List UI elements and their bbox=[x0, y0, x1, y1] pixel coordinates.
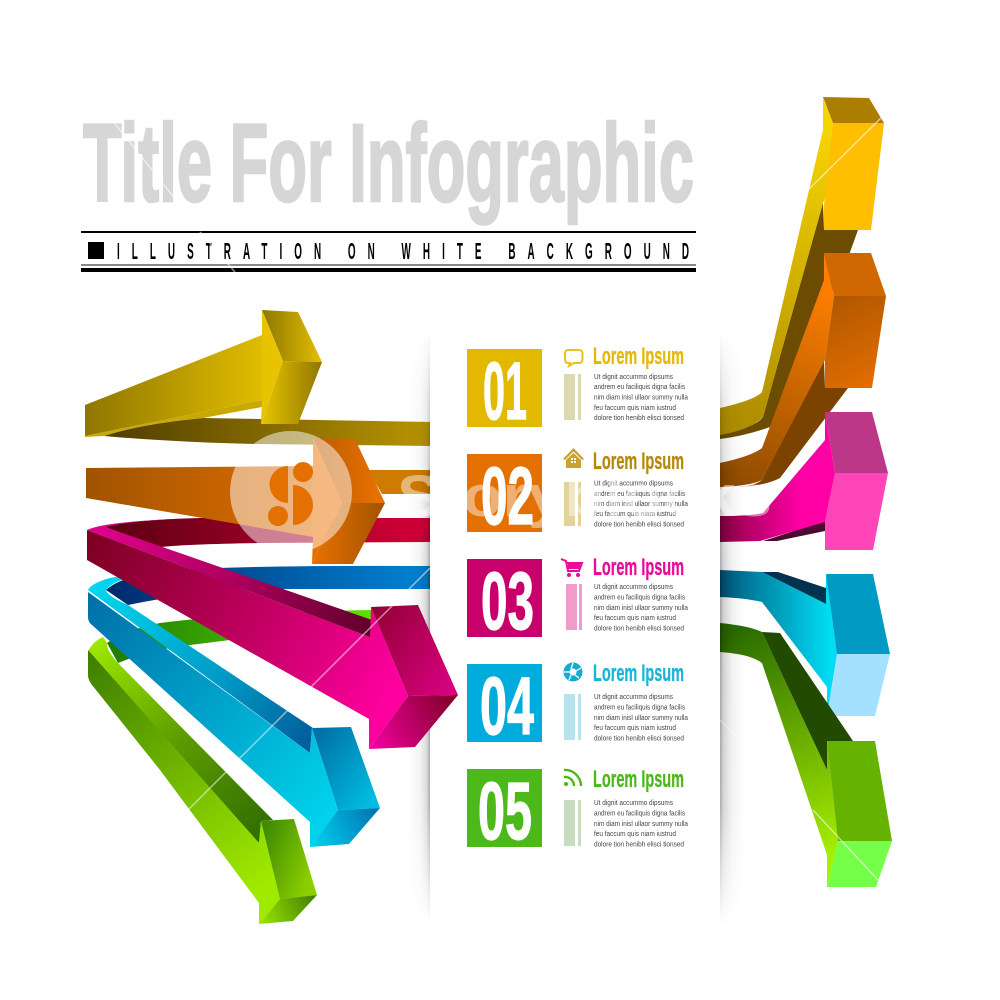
number tile 03 bbox=[467, 556, 542, 647]
text block 3: andrem eu faciliquis digna facilis bbox=[594, 594, 685, 602]
text block 4: Ut dignit accummo dipsums bbox=[594, 694, 673, 701]
progress bar 4 bbox=[564, 694, 581, 740]
right arrow: yellow bbox=[720, 97, 884, 439]
text block 5: Ut dignit accummo dipsums bbox=[594, 800, 673, 807]
number tile 04 bbox=[467, 661, 542, 752]
icon: speech bubble bbox=[565, 350, 582, 366]
text block 3: Ut dignit accummo dipsums bbox=[594, 584, 673, 591]
left ribbons behind the panel bbox=[88, 418, 432, 663]
text block 5: andrem eu faciliquis digna facilis bbox=[594, 810, 685, 818]
number tile 05 bbox=[467, 766, 542, 857]
text block 2: feu faccum quis niam iustrud bbox=[594, 511, 676, 518]
right arrow: orange bbox=[720, 253, 886, 487]
progress bar 3 bbox=[566, 584, 582, 630]
text block 4 bbox=[593, 660, 688, 742]
watermark bbox=[112, 115, 884, 880]
subtitle bar: ILLUSTRATION ON WHITE BACKGROUND bbox=[117, 238, 689, 264]
icon: shopping cart bbox=[561, 559, 582, 577]
text block 1 bbox=[593, 343, 688, 422]
number tile 04: 04 bbox=[480, 661, 534, 752]
progress bar 5 bbox=[564, 800, 581, 846]
text block 3: nim diam inisl ullaor summy nulla bbox=[594, 605, 688, 612]
number tile 03: 03 bbox=[481, 556, 534, 647]
text block 1: Ut dignit accummo dipsums bbox=[594, 374, 673, 381]
text block 4: dolore tion henibh elisci tionsed bbox=[594, 736, 684, 742]
text block 5: nim diam inisl ullaor summy nulla bbox=[594, 821, 688, 828]
text block 1: andrem eu faciliquis digna facilis bbox=[594, 384, 685, 391]
number tile 02 bbox=[467, 451, 542, 542]
text block 2 bbox=[593, 448, 688, 528]
text block 1: nim diam inisl ullaor summy nulla bbox=[594, 394, 688, 402]
text block 1: dolore tion henibh elisci tionsed bbox=[594, 415, 684, 422]
text block 3 bbox=[593, 554, 688, 632]
watermark: Storyblocks bbox=[397, 464, 772, 529]
left arrow: green bbox=[88, 637, 317, 924]
text block 3: Lorem Ipsum bbox=[593, 554, 684, 581]
text block 3: dolore tion henibh elisci tionsed bbox=[594, 626, 684, 632]
text block 2: Ut dignit accummo dipsums bbox=[594, 480, 673, 488]
icon: rss bbox=[564, 770, 581, 786]
text block 2: Lorem Ipsum bbox=[593, 448, 684, 475]
text block 2: nim diam inisl ullaor summy nulla bbox=[594, 501, 688, 508]
number tile 01 bbox=[467, 346, 542, 437]
right arrow: magenta bbox=[720, 412, 888, 550]
text block 5: dolore tion henibh elisci tionsed bbox=[594, 842, 684, 848]
white centre panel bbox=[430, 335, 720, 925]
text block 1: feu faccum quis niam iustrud bbox=[594, 405, 676, 412]
text block 1: Lorem Ipsum bbox=[593, 343, 684, 370]
left arrow: magenta bbox=[87, 518, 458, 749]
icon: house bbox=[563, 448, 584, 468]
number tile 02: 02 bbox=[481, 451, 534, 542]
left arrow: blue bbox=[88, 578, 380, 847]
right arrow: blue bbox=[720, 570, 890, 716]
text block 4: nim diam inisl ullaor summy nulla bbox=[594, 715, 688, 722]
text block 5 bbox=[593, 766, 688, 848]
text block 5: feu faccum quis niam iustrud bbox=[594, 831, 676, 838]
text block 4: feu faccum quis niam iustrud bbox=[594, 725, 676, 732]
text block 3: feu faccum quis niam iustrud bbox=[594, 615, 676, 622]
number tile 05: 05 bbox=[478, 766, 532, 857]
left arrow: yellow bbox=[85, 310, 322, 437]
progress bar 1 bbox=[564, 374, 581, 420]
progress bar 2 bbox=[564, 482, 581, 526]
number tile 01: 01 bbox=[483, 346, 527, 437]
text block 4: andrem eu faciliquis digna facilis bbox=[594, 704, 685, 712]
left arrow: orange bbox=[86, 438, 385, 564]
text block 2: dolore tion henibh elisci tionsed bbox=[594, 522, 684, 528]
text block 5: Lorem Ipsum bbox=[593, 766, 684, 793]
text block 4: Lorem Ipsum bbox=[593, 660, 684, 687]
panel shadows bbox=[408, 330, 744, 925]
text block 2: andrem eu faciliquis digna facilis bbox=[594, 491, 685, 498]
right arrow: green bbox=[720, 623, 892, 887]
icon: aperture bbox=[564, 662, 582, 682]
subtitle bar bbox=[81, 231, 696, 272]
